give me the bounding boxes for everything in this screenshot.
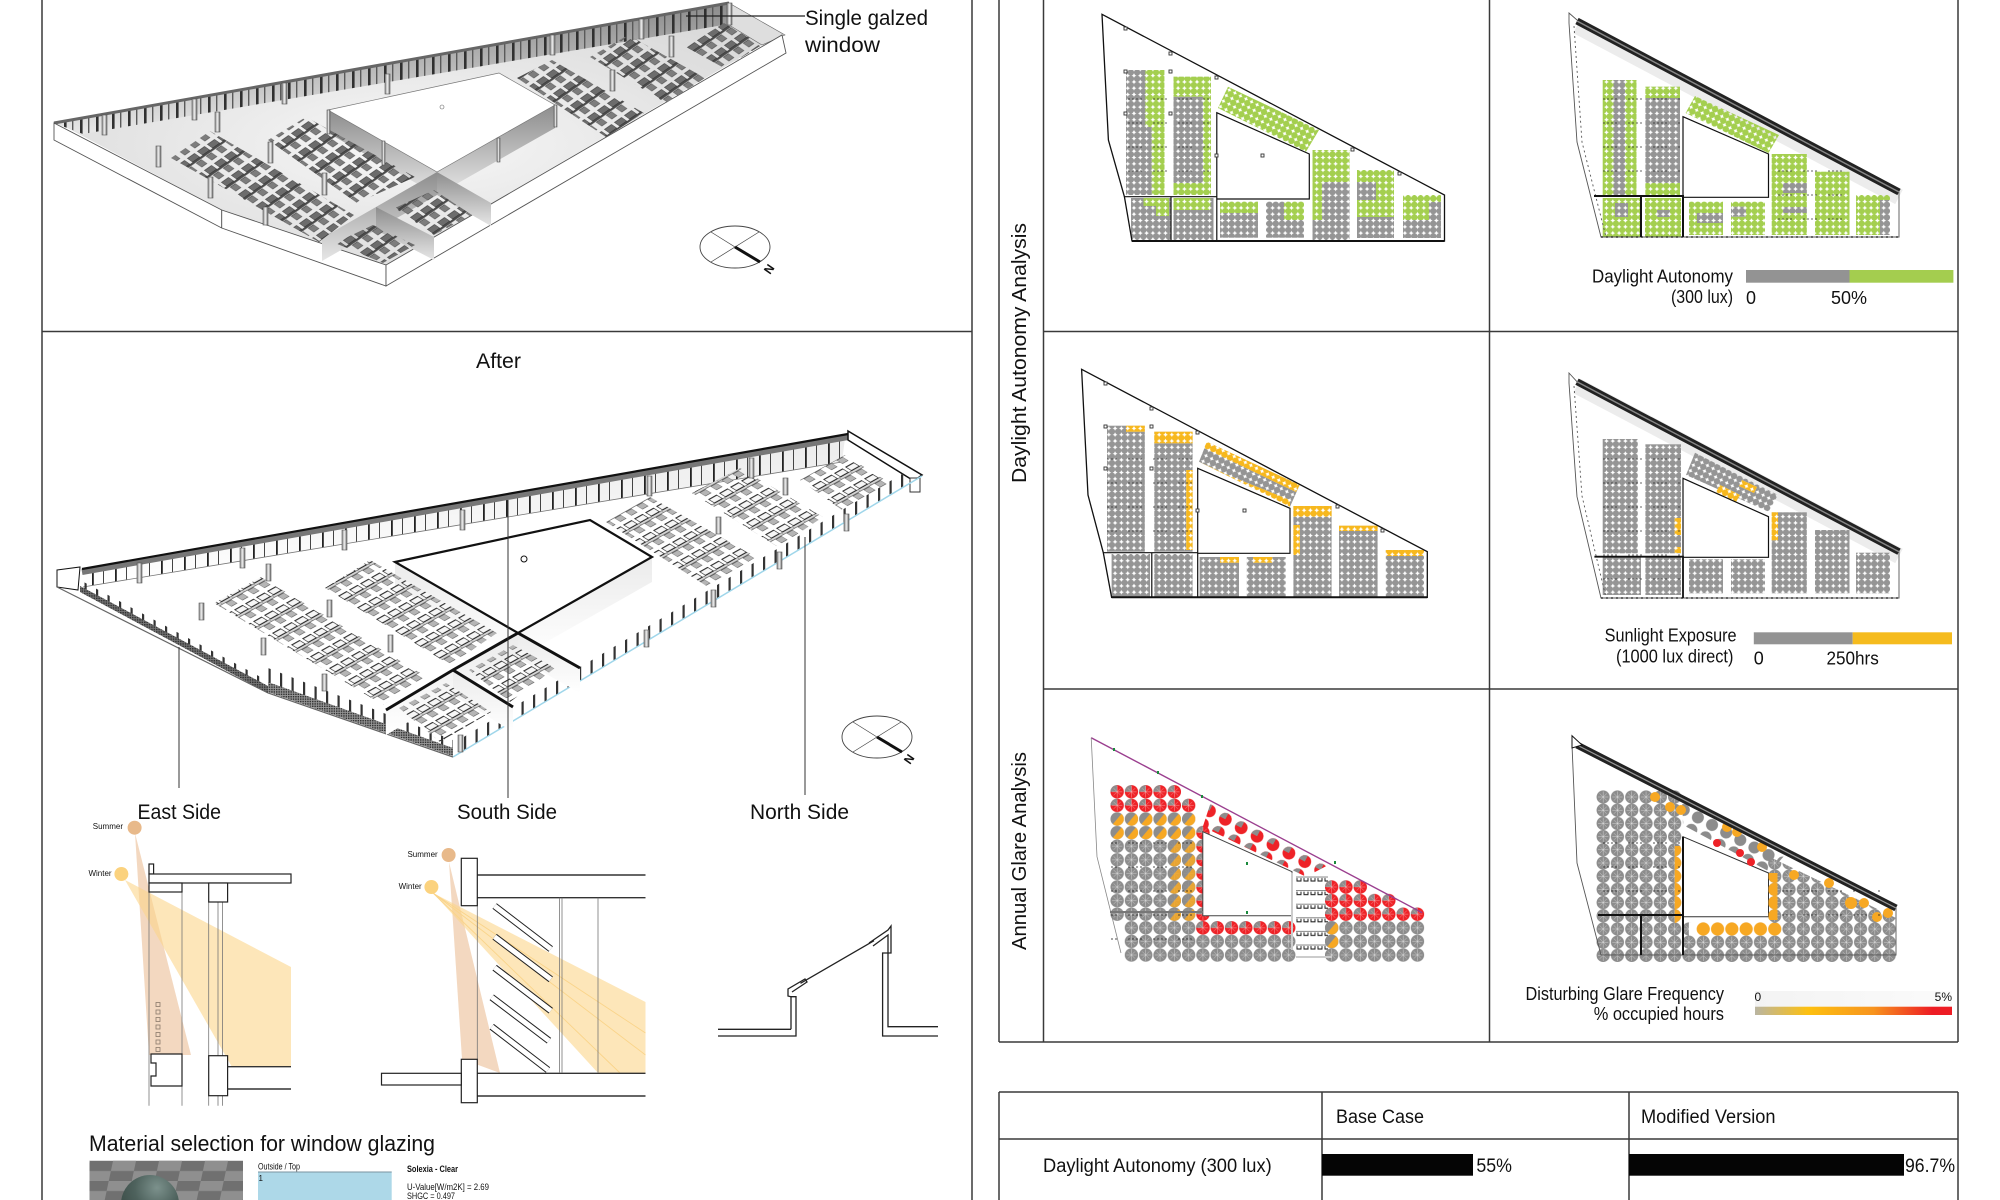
rotated label: Annual Glare Analysis: Annual Glare Analysis (1009, 752, 1031, 950)
glazing properties: U-Value[W/m2K] = 2.69 (407, 1182, 489, 1193)
section diagram: South Side (382, 848, 646, 1103)
legend: glare frequency: % occupied hours (1594, 1004, 1724, 1024)
heading: East Side: East Side (138, 801, 221, 824)
legend: glare frequency: 0 (1754, 990, 1762, 1004)
axonometric view: before (54, 2, 786, 286)
bar: modified 96.7% (1629, 1154, 1955, 1177)
core walls (386, 557, 652, 735)
section diagram: South Side: Winter (399, 882, 422, 891)
legend: glare frequency: 5% (1935, 990, 1952, 1004)
glazing layer diagram: 1 (258, 1174, 264, 1183)
section diagram: East Side: Winter (88, 869, 112, 878)
legend: glare frequency (1526, 984, 1952, 1024)
panel: analysis grid (999, 0, 1958, 1042)
plan: daylight autonomy, modified (1569, 13, 1899, 237)
leader lines to sections (179, 500, 805, 798)
section diagram: North Side (718, 926, 938, 1036)
icon: north compass, before: N (761, 262, 777, 277)
bar: modified 96.7%: 96.7% (1905, 1156, 1955, 1177)
structural columns (137, 458, 849, 752)
plan: sunlight exposure, modified (1569, 373, 1899, 598)
glazing properties: Solexia - Clear (407, 1164, 458, 1175)
table: summary comparison (999, 1092, 1958, 1200)
glazing layer diagram (258, 1162, 392, 1200)
glazing properties (407, 1164, 489, 1200)
glazing material swatch (90, 1161, 243, 1200)
legend: sunlight exposure: (1000 lux direct) (1616, 647, 1733, 667)
legend: sunlight exposure: 0 (1754, 648, 1764, 668)
louvers (492, 906, 551, 1070)
header: Base Case: Base Case (1336, 1107, 1424, 1128)
heading: North Side: North Side (750, 801, 849, 824)
legend: daylight autonomy: Daylight Autonomy (1592, 267, 1733, 287)
desk clusters (171, 23, 762, 263)
legend: daylight autonomy: 0 (1746, 288, 1756, 308)
plan: daylight autonomy, base case (1102, 14, 1444, 241)
heading: material selection: Material selection for window glazing (89, 1131, 435, 1156)
section diagram: East Side (88, 821, 291, 1106)
legend: glare frequency: Disturbing Glare Frequency (1526, 984, 1724, 1004)
plan: annual glare, modified (1572, 736, 1896, 962)
rotated label: Daylight Autonomy Analysis: Daylight Autonomy Analysis (1009, 223, 1031, 483)
row label: daylight autonomy: Daylight Autonomy (300 lux) (1043, 1156, 1272, 1177)
section diagram: East Side: Summer (93, 822, 123, 831)
heading: After: After (476, 350, 521, 373)
legend: sunlight exposure: Sunlight Exposure (1605, 626, 1737, 646)
glazing layer diagram: Outside / Top (258, 1162, 300, 1172)
panel: left frame with before and after (42, 0, 972, 1200)
heading: South Side: South Side (457, 801, 557, 824)
callout: single glazed window: window (804, 34, 881, 57)
section diagram: South Side: Summer (407, 850, 438, 859)
icon: north compass, before (700, 226, 777, 277)
legend: sunlight exposure: 250hrs (1826, 648, 1879, 668)
bar: base case 55%: 55% (1476, 1156, 1512, 1177)
desk clusters (214, 455, 890, 742)
icon: north compass, after: N (901, 752, 917, 767)
legend: daylight autonomy (1592, 267, 1953, 308)
structural columns (102, 3, 732, 225)
callout: single glazed window: Single galzed (805, 7, 928, 30)
callout: single glazed window (686, 7, 928, 57)
plan: annual glare, base case (1091, 738, 1425, 962)
icon: north compass, after (842, 716, 917, 767)
plan: sunlight exposure, base case (1082, 369, 1427, 597)
legend: sunlight exposure (1605, 626, 1952, 668)
bar: base case 55% (1322, 1154, 1512, 1177)
header: Modified Version: Modified Version (1641, 1107, 1776, 1128)
legend: daylight autonomy: (300 lux) (1671, 287, 1733, 307)
axonometric view: after (57, 431, 922, 757)
legend: daylight autonomy: 50% (1831, 288, 1867, 308)
